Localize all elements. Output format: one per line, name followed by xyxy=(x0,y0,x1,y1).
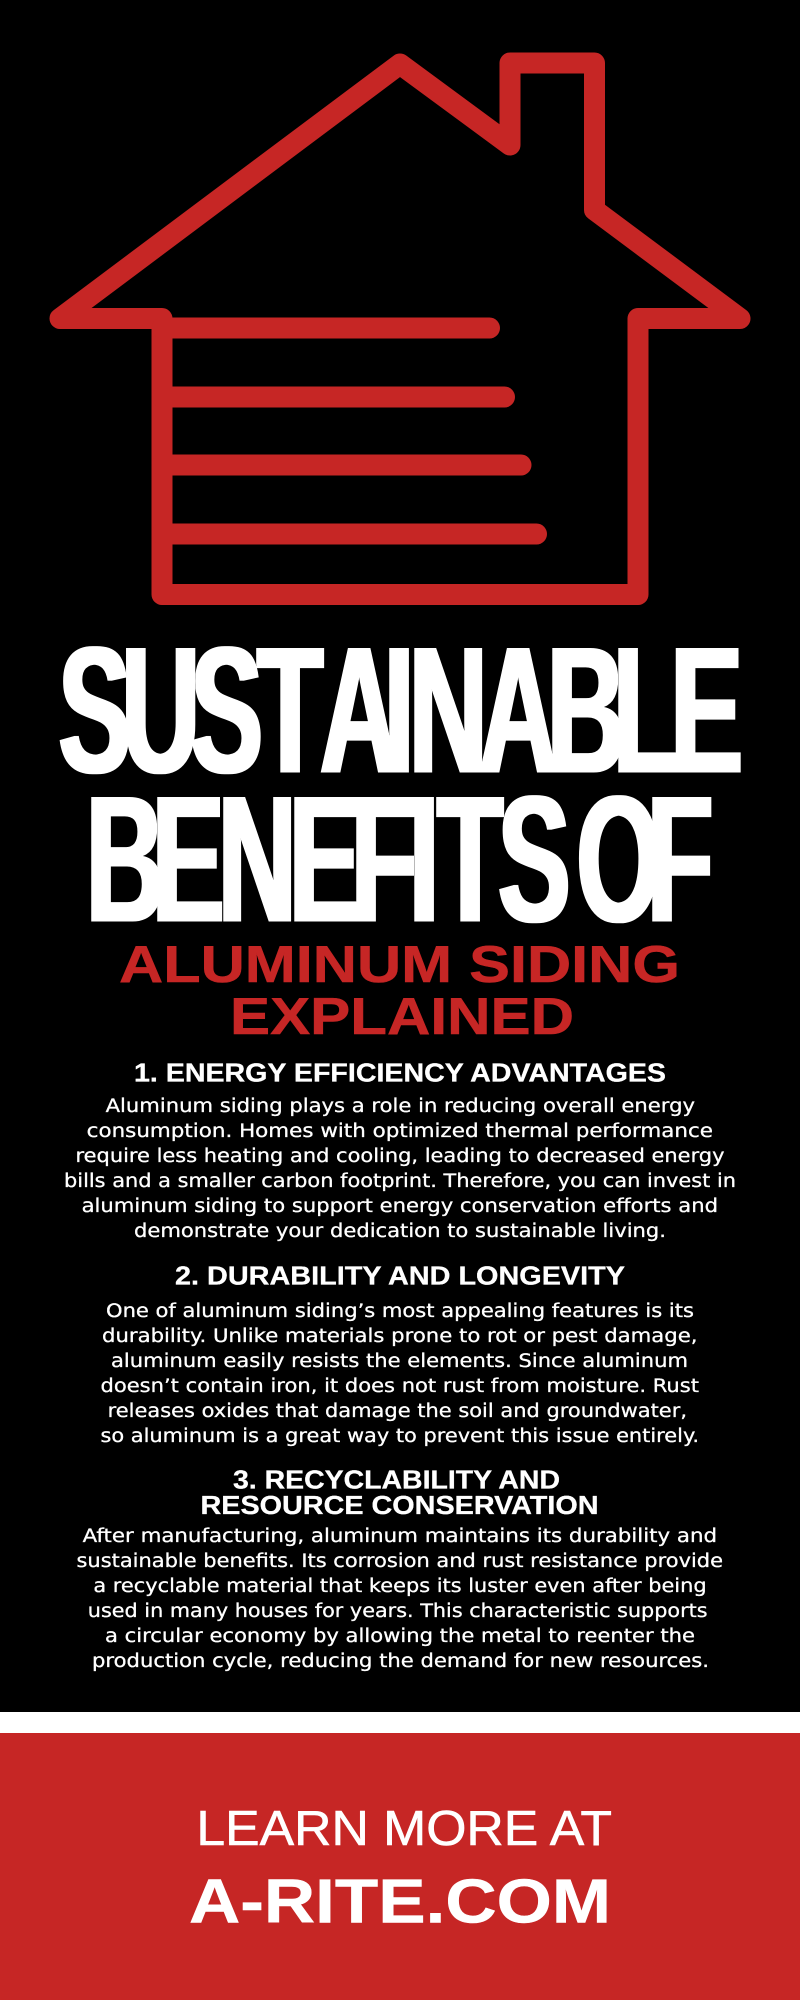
text block: section 3: After manufacturing, aluminum maintains its durability and xyxy=(83,1526,717,1547)
text block: section 3: a circular economy by allowing the metal to reenter the xyxy=(105,1626,695,1647)
text block: section 3: a recyclable material that keeps its luster even after being xyxy=(93,1576,707,1597)
text block: section 1 xyxy=(64,1096,736,1242)
panel: footer call to action xyxy=(0,1733,800,2000)
subtitle: ALUMINUM SIDING xyxy=(119,936,680,994)
section 3: recyclability xyxy=(76,1466,723,1672)
text block: section 3: sustainable benefits. Its corrosion and rust resistance provide xyxy=(76,1551,723,1572)
white divider band xyxy=(0,1712,800,1733)
subtitle: EXPLAINED xyxy=(230,988,574,1046)
heading: section 1: 1. ENERGY EFFICIENCY ADVANTAGES xyxy=(134,1060,666,1088)
text block: section 2: doesn’t contain iron, it does not rust from moisture. Rust xyxy=(100,1376,699,1397)
footer text: website: A-RITE.COM xyxy=(189,1867,611,1937)
text block: section 3 xyxy=(76,1526,723,1672)
heading: section 2: 2. DURABILITY AND LONGEVITY xyxy=(175,1262,625,1290)
text block: section 2: durability. Unlike materials prone to rot or pest damage, xyxy=(102,1326,698,1347)
text block: section 1: Aluminum siding plays a role in reducing overall energy xyxy=(106,1096,695,1117)
text block: section 2 xyxy=(100,1301,699,1447)
heading: section 3: RESOURCE CONSERVATION xyxy=(200,1492,598,1520)
title: BENEFITS OF xyxy=(86,758,713,960)
heading: section 3: 3. RECYCLABILITY AND xyxy=(233,1466,560,1494)
section 1: energy efficiency xyxy=(64,1060,736,1242)
text block: section 2: aluminum easily resists the elements. Since aluminum xyxy=(111,1351,688,1372)
icon: house with siding xyxy=(60,63,740,594)
heading: section 3 xyxy=(200,1466,598,1520)
footer text: learn more: LEARN MORE AT xyxy=(196,1801,612,1856)
text block: section 2: releases oxides that damage the soil and groundwater, xyxy=(108,1401,687,1422)
section 2: durability xyxy=(100,1262,699,1447)
text block: section 2: One of aluminum siding’s most appealing features is its xyxy=(106,1301,694,1322)
text block: section 1: require less heating and cooling, leading to decreased energy xyxy=(76,1146,725,1167)
text block: section 1: aluminum siding to support energy conservation efforts and xyxy=(82,1196,718,1217)
text block: section 3: production cycle, reducing the demand for new resources. xyxy=(92,1651,709,1672)
text block: section 3: used in many houses for years. This characteristic supports xyxy=(88,1601,708,1622)
text block: section 1: consumption. Homes with optimized thermal performance xyxy=(87,1121,713,1142)
text block: section 1: demonstrate your dedication to sustainable living. xyxy=(134,1221,666,1242)
text block: section 1: bills and a smaller carbon footprint. Therefore, you can invest in xyxy=(64,1171,736,1192)
title xyxy=(58,609,743,960)
title: SUSTAINABLE xyxy=(58,609,743,811)
text block: section 2: so aluminum is a great way to prevent this issue entirely. xyxy=(100,1426,699,1447)
subtitle xyxy=(119,936,680,1046)
